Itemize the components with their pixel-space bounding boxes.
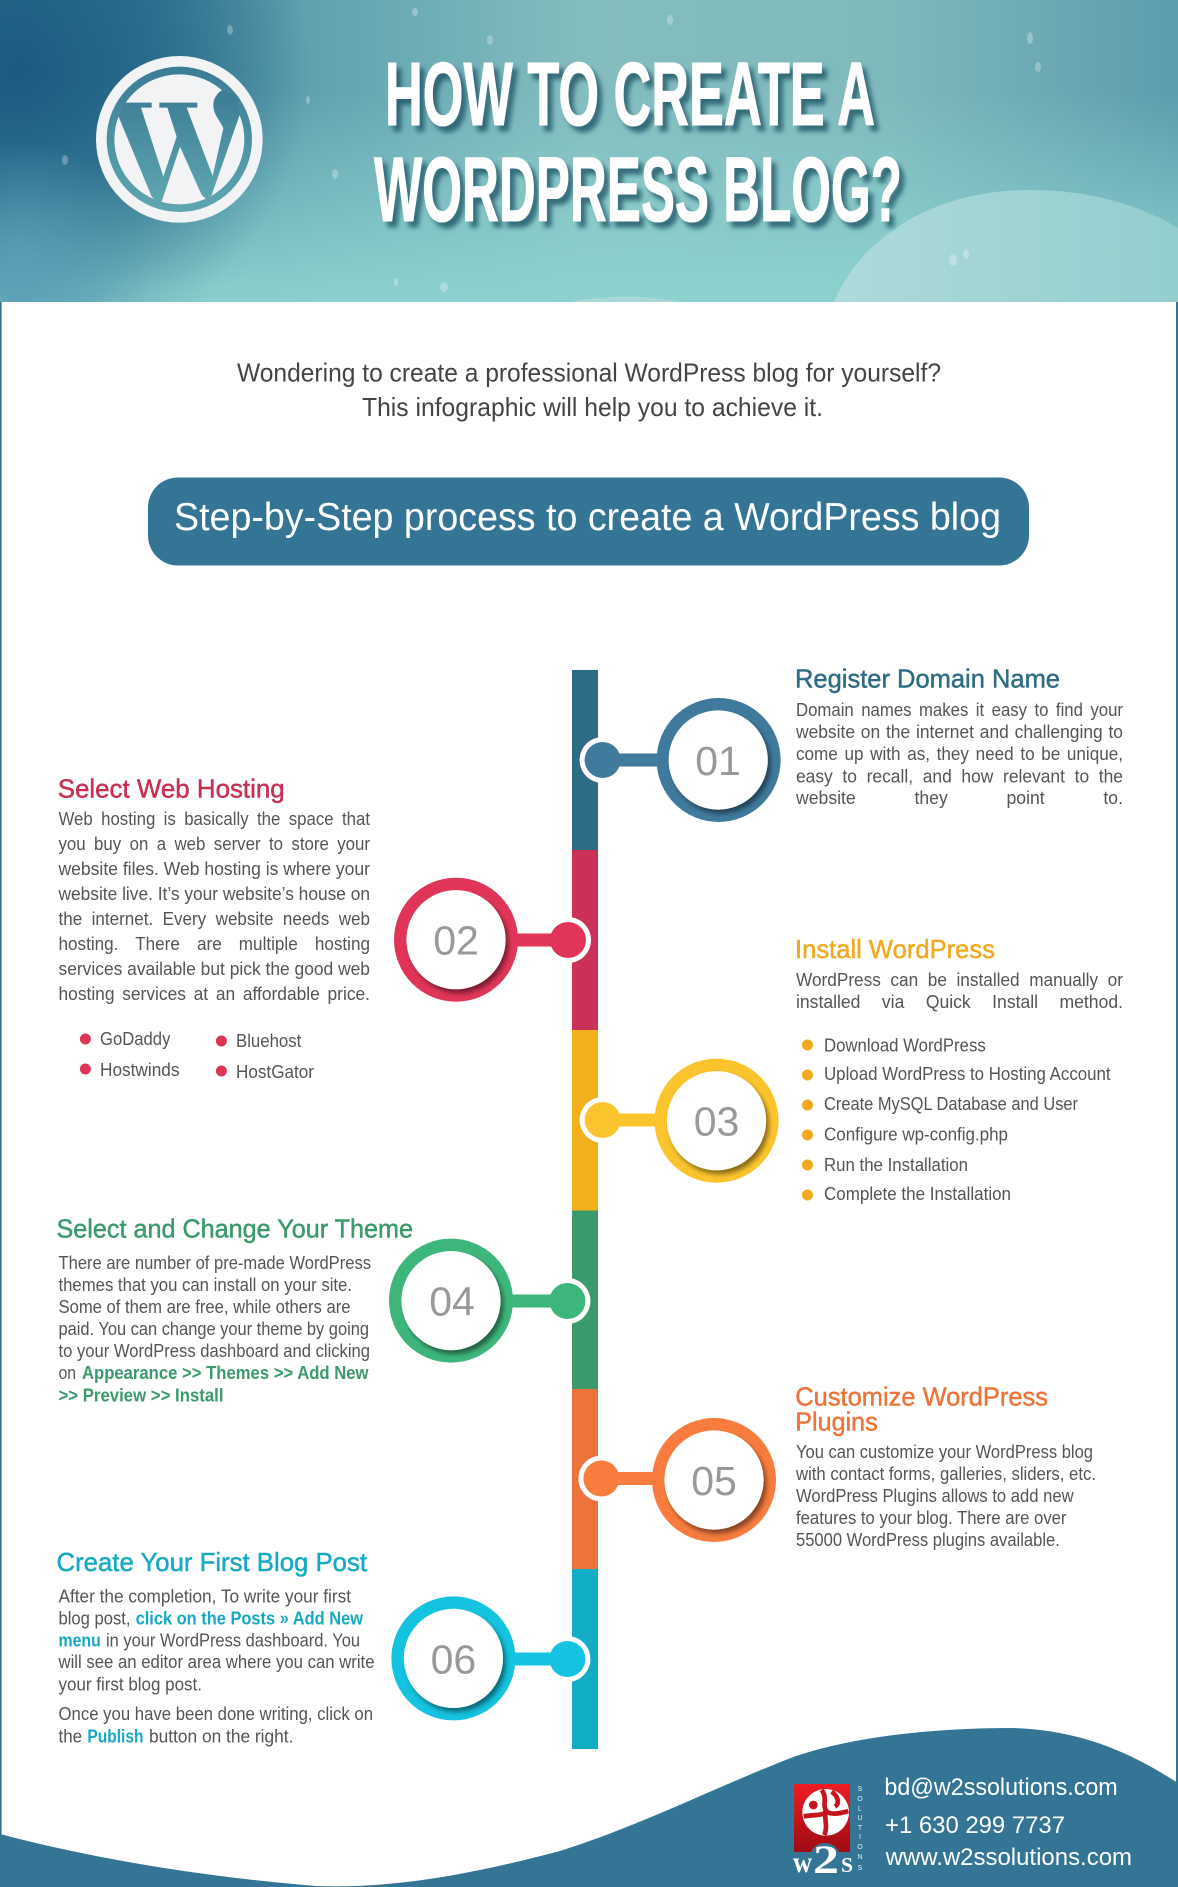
step 06 text: Create Your First Blog Post: blog post, xyxy=(58,1609,130,1629)
footer contact details xyxy=(884,1774,1132,1871)
step 06 text: Create Your First Blog Post xyxy=(56,1547,374,1746)
marker 02 xyxy=(394,878,591,1002)
icon: w2s solutions logo: w xyxy=(793,1846,812,1879)
step 05 text: Customize WordPress Plugins: 55000 WordPress plugins available. xyxy=(796,1530,1060,1550)
vertical wordmark: I xyxy=(859,1834,861,1841)
marker 03: 03 xyxy=(694,1098,739,1144)
footer wave xyxy=(0,1728,1178,1887)
intro text: This infographic will help you to achieve it. xyxy=(362,392,823,422)
step 04 text: Select and Change Your Theme: to your WordPress dashboard and clicking xyxy=(58,1341,370,1361)
step 06 text: Create Your First Blog Post: Publish xyxy=(87,1726,144,1746)
step 04 text: Select and Change Your Theme: Select and Change Your Theme xyxy=(56,1214,413,1244)
step 02 text: Select Web Hosting xyxy=(58,773,370,1082)
step 03 text: Install WordPress xyxy=(795,934,1123,1204)
hosting provider list: Bluehost xyxy=(236,1031,301,1051)
vertical wordmark: O xyxy=(857,1796,863,1803)
step 06 text: Create Your First Blog Post: your first blog post. xyxy=(58,1674,202,1694)
hosting provider list: HostGator xyxy=(236,1062,314,1082)
step 02 text: Select Web Hosting: Select Web Hosting xyxy=(58,773,285,803)
marker 01: 01 xyxy=(695,738,741,784)
title xyxy=(374,45,902,241)
header banner xyxy=(0,0,1178,302)
marker 04: 04 xyxy=(429,1278,475,1324)
vertical wordmark: S xyxy=(858,1786,863,1793)
step 05 text: Customize WordPress Plugins: Plugins xyxy=(795,1406,878,1436)
step 06 text: Create Your First Blog Post: After the completion, To write your first xyxy=(58,1586,351,1606)
marker 03 xyxy=(580,1059,778,1183)
icon: w2s solutions logo: S xyxy=(841,1853,853,1877)
step 05 text: Customize WordPress Plugins: You can customize your WordPress blog xyxy=(796,1442,1093,1462)
intro text xyxy=(237,358,941,422)
step 05 text: Customize WordPress Plugins: features to your blog. There are over xyxy=(796,1508,1066,1528)
step 01 text: Register Domain Name: website they point to. xyxy=(795,788,1123,808)
step 06 text: Create Your First Blog Post: will see an editor area where you can write xyxy=(58,1652,375,1672)
step 02 text: Select Web Hosting: you buy on a web server to store your xyxy=(58,834,370,854)
icon: WordPress logo xyxy=(96,56,263,223)
step 03 text: Install WordPress: Install WordPress xyxy=(795,934,995,964)
step 05 text: Customize WordPress Plugins: WordPress Plugins allows to add new xyxy=(796,1486,1075,1506)
vertical wordmark xyxy=(857,1786,863,1872)
step 04 text: Select and Change Your Theme: There are number of pre-made WordPress xyxy=(58,1253,371,1273)
step 06 text: Create Your First Blog Post: menu xyxy=(58,1630,101,1650)
step 02 text: Select Web Hosting: Web hosting is basically the space that xyxy=(58,809,370,829)
step 06 text: Create Your First Blog Post: Create Your First Blog Post xyxy=(56,1547,368,1577)
step 04 text: Select and Change Your Theme: on xyxy=(58,1363,76,1383)
step 01 text: Register Domain Name: website on the internet and challenging to xyxy=(795,722,1123,742)
step 06 text: Create Your First Blog Post: the xyxy=(58,1726,82,1746)
step 03 text: Install WordPress: WordPress can be installed manually or xyxy=(796,970,1123,990)
step 04 text: Select and Change Your Theme: >> Preview >> Install xyxy=(58,1386,224,1406)
step 02 text: Select Web Hosting: website files. Web hosting is where your xyxy=(58,859,370,879)
step 01 text: Register Domain Name: come up with as, they need to be unique, xyxy=(796,744,1123,764)
installation checklist: Upload WordPress to Hosting Account xyxy=(824,1064,1111,1084)
step 01 text: Register Domain Name: easy to recall, and how relevant to the xyxy=(796,766,1123,786)
intro text: Wondering to create a professional WordPress blog for yourself? xyxy=(237,358,941,388)
vertical wordmark: L xyxy=(858,1806,862,1813)
heading bar: Step-by-Step process to create a WordPress blog xyxy=(174,496,1001,539)
footer contact details: www.w2ssolutions.com xyxy=(885,1844,1132,1871)
step 02 text: Select Web Hosting: hosting services at an affordable price. xyxy=(58,984,370,1004)
footer contact details: bd@w2ssolutions.com xyxy=(884,1774,1118,1801)
step 04 text: Select and Change Your Theme: Appearance >> Themes >> Add New xyxy=(82,1363,369,1383)
step 05 text: Customize WordPress Plugins: Customize WordPress xyxy=(795,1382,1048,1412)
marker 04 xyxy=(389,1239,590,1363)
marker 06: 06 xyxy=(431,1636,476,1682)
vertical wordmark: O xyxy=(857,1844,863,1851)
installation checklist: Run the Installation xyxy=(824,1155,968,1175)
installation checklist: Complete the Installation xyxy=(824,1184,1011,1204)
step 01 text: Register Domain Name: Register Domain Name xyxy=(795,664,1060,694)
icon: w2s solutions logo: 2 xyxy=(813,1837,839,1882)
swirl emblem xyxy=(802,1789,849,1836)
step 01 text: Register Domain Name xyxy=(795,664,1123,808)
step 02 text: Select Web Hosting: the internet. Every website needs web xyxy=(58,909,370,929)
step 01 text: Register Domain Name: Domain names makes it easy to find your xyxy=(796,700,1123,720)
marker 05: 05 xyxy=(691,1458,737,1504)
step 06 text: Create Your First Blog Post: Once you have been done writing, click on xyxy=(58,1704,373,1724)
installation checklist: Download WordPress xyxy=(824,1035,986,1055)
timeline spine xyxy=(572,670,598,1749)
hosting provider list: Hostwinds xyxy=(100,1060,180,1080)
hosting provider list: GoDaddy xyxy=(100,1029,170,1049)
vertical wordmark: T xyxy=(858,1825,863,1832)
step 04 text: Select and Change Your Theme xyxy=(56,1214,413,1406)
step 04 text: Select and Change Your Theme: Some of them are free, while others are xyxy=(58,1297,350,1317)
installation checklist: Create MySQL Database and User xyxy=(824,1094,1078,1114)
installation checklist xyxy=(802,1035,1111,1204)
step 02 text: Select Web Hosting: hosting. There are multiple hosting xyxy=(58,934,370,954)
marker 05 xyxy=(578,1418,776,1542)
step 06 text: Create Your First Blog Post: in your WordPress dashboard. You xyxy=(106,1630,360,1650)
step 06 text: Create Your First Blog Post: click on the Posts » Add New xyxy=(136,1609,364,1629)
installation checklist: Configure wp-config.php xyxy=(824,1125,1008,1145)
marker 06 xyxy=(391,1596,590,1720)
icon: w2s solutions logo xyxy=(793,1784,863,1882)
step 02 text: Select Web Hosting: website live. It’s your website’s house on xyxy=(58,884,370,904)
vertical wordmark: U xyxy=(857,1815,863,1822)
hosting provider list xyxy=(80,1029,314,1082)
marker 01 xyxy=(580,698,781,822)
step 05 text: Customize WordPress Plugins: with contact forms, galleries, sliders, etc. xyxy=(795,1464,1096,1484)
step 04 text: Select and Change Your Theme: paid. You can change your theme by going xyxy=(58,1319,369,1339)
step 02 text: Select Web Hosting: services available but pick the good web xyxy=(58,959,370,979)
marker 02: 02 xyxy=(433,918,479,964)
vertical wordmark: S xyxy=(858,1865,863,1872)
footer contact details: +1 630 299 7737 xyxy=(885,1812,1065,1839)
heading bar xyxy=(148,478,1029,566)
step 06 text: Create Your First Blog Post: button on the right. xyxy=(149,1726,293,1746)
step 04 text: Select and Change Your Theme: themes that you can install on your site. xyxy=(58,1275,352,1295)
step 03 text: Install WordPress: installed via Quick Install method. xyxy=(796,992,1123,1012)
vertical wordmark: N xyxy=(857,1854,863,1861)
step 05 text: Customize WordPress Plugins xyxy=(795,1382,1096,1550)
